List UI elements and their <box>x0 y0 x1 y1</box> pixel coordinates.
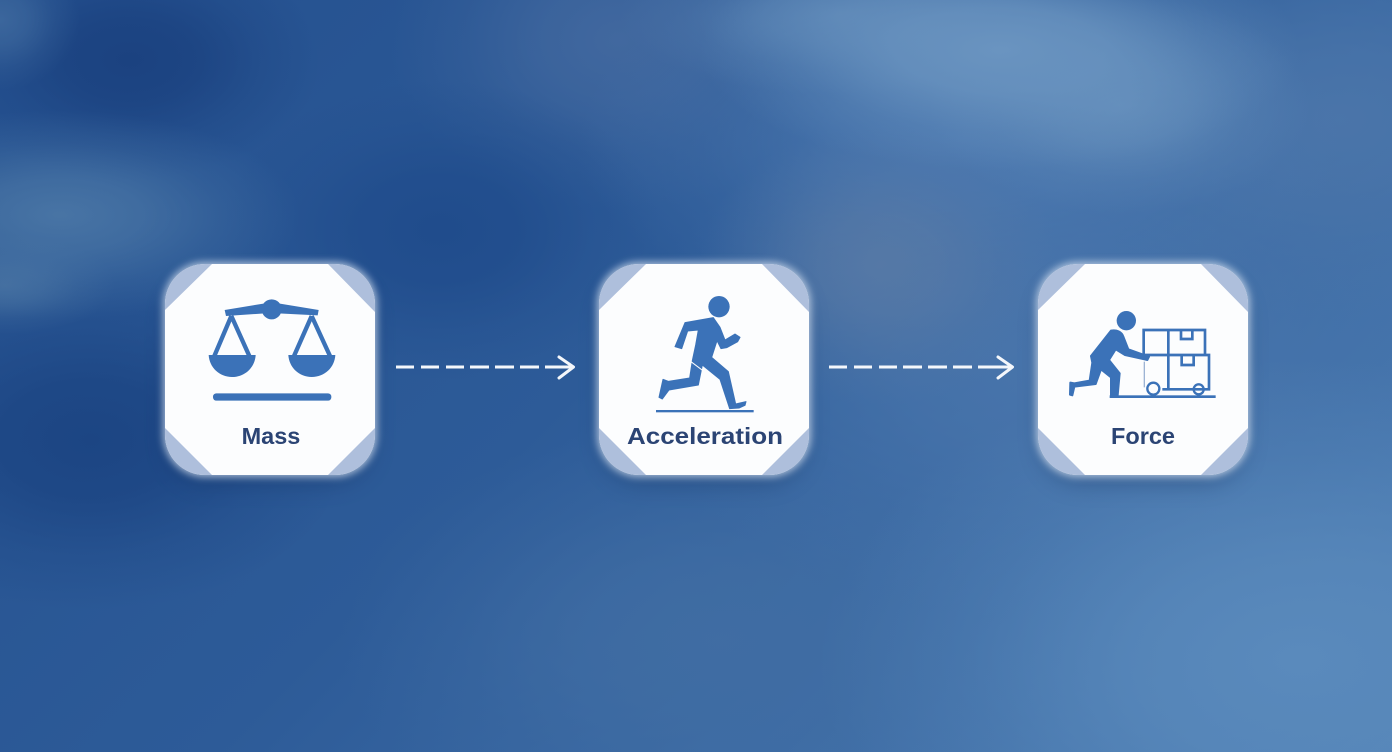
arrow: Mass to Acceleration <box>396 357 574 378</box>
card: Acceleration <box>597 262 811 483</box>
label: Force: Force <box>1111 423 1175 449</box>
card: Mass <box>163 262 377 483</box>
label: Acceleration: Acceleration <box>627 423 783 449</box>
arrow: Acceleration to Force <box>829 357 1012 378</box>
infographic: mass, acceleration, force flow <box>158 256 1255 492</box>
label: Mass: Mass <box>242 423 300 449</box>
icon: balance scale <box>209 299 335 401</box>
card: Force <box>1036 262 1250 483</box>
icon: running person <box>656 296 754 412</box>
icon: person pushing boxes on a cart <box>1070 311 1216 398</box>
